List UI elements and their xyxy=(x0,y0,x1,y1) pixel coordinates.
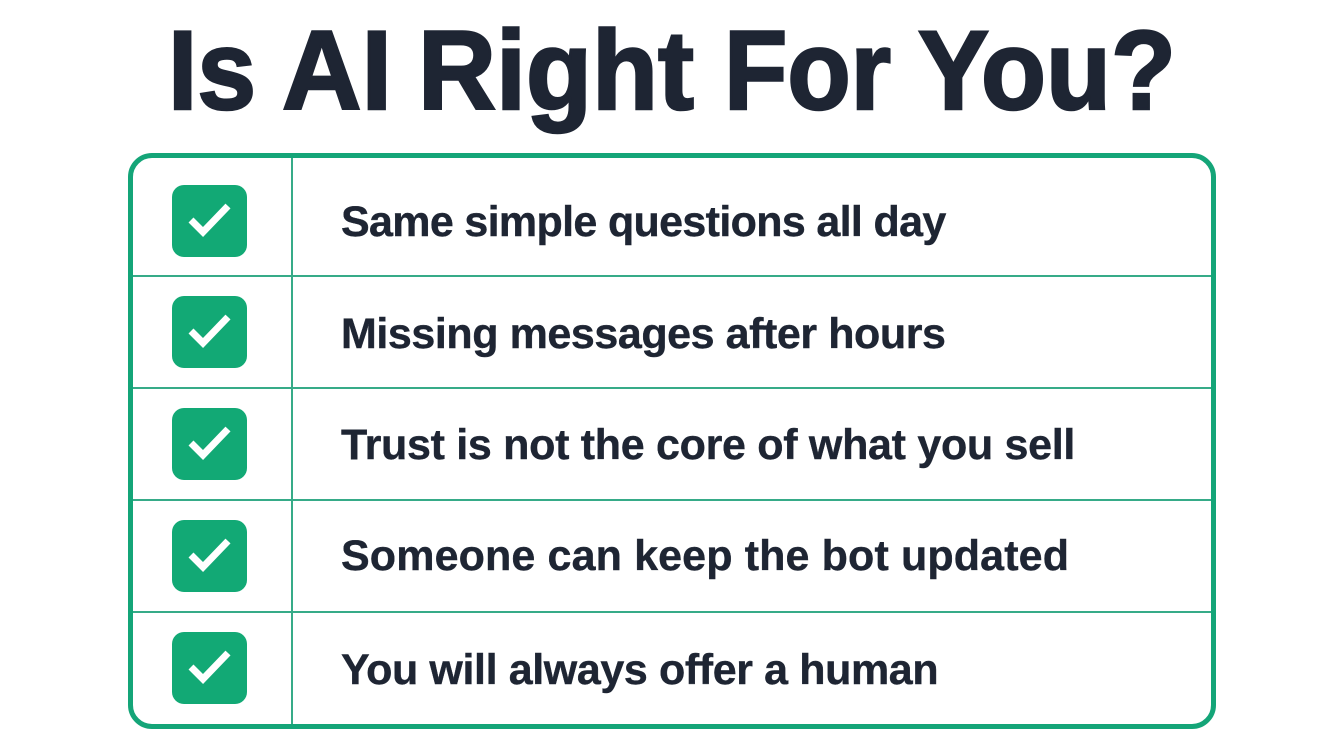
title: Is xyxy=(168,8,256,133)
title: You? xyxy=(918,8,1176,133)
row 2 xyxy=(172,296,946,368)
row 5 xyxy=(172,632,938,704)
title: AI xyxy=(282,8,392,133)
text: row 2: Missing messages after hours xyxy=(341,310,946,358)
row 4 xyxy=(172,520,1069,592)
icon: check 5 xyxy=(172,632,247,704)
title xyxy=(168,8,1176,134)
icon: check 1 xyxy=(172,185,247,257)
title: For xyxy=(724,8,891,133)
row 1 xyxy=(172,185,946,257)
text: row 4: Someone can keep the bot updated xyxy=(341,532,1069,580)
checklist table frame xyxy=(128,153,1216,729)
title: Right xyxy=(418,8,694,133)
icon: check 3 xyxy=(172,408,247,480)
row 3 xyxy=(172,408,1075,480)
text: row 1: Same simple questions all day xyxy=(341,198,946,246)
text: row 5: You will always offer a human xyxy=(341,646,938,694)
text: row 3: Trust is not the core of what you sell xyxy=(341,421,1075,469)
icon: check 2 xyxy=(172,296,247,368)
icon: check 4 xyxy=(172,520,247,592)
